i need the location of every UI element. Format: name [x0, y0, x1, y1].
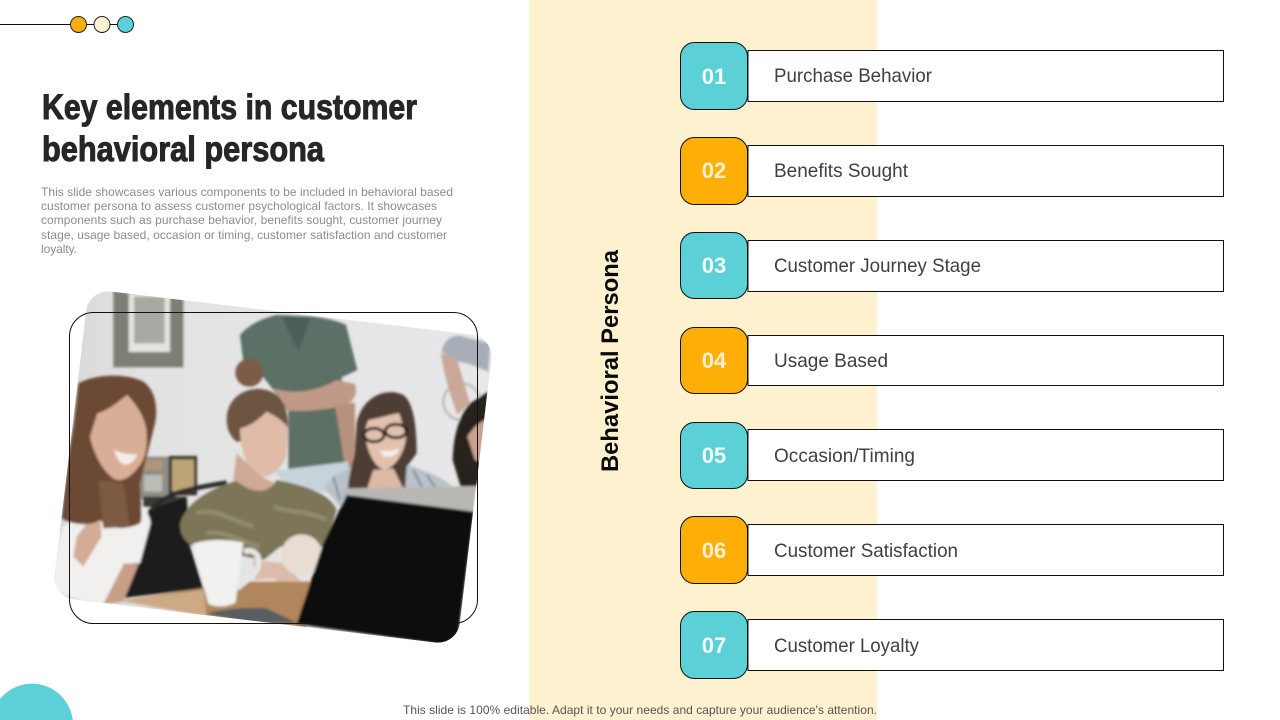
photo: team looking at a laptop — [54, 292, 492, 643]
middle woman — [180, 359, 337, 592]
books on shelf — [139, 456, 197, 507]
item 04 — [680, 328, 1224, 394]
item 04: Usage Based — [774, 350, 888, 372]
item 06: 06 — [702, 538, 726, 563]
table — [120, 582, 313, 628]
item 01: 01 — [702, 64, 726, 89]
description text: stage, usage based, occasion or timing, customer satisfaction and customer — [41, 228, 447, 242]
top right arm — [441, 336, 490, 415]
item 07: 07 — [702, 633, 726, 658]
item 03: Customer Journey Stage — [774, 255, 981, 277]
item 01: Purchase Behavior — [774, 65, 932, 87]
description text: customer persona to assess customer psychological factors. It showcases — [41, 199, 437, 213]
item 06 — [680, 516, 1224, 584]
title: Key elements in customer — [42, 88, 417, 127]
item 07 — [680, 612, 1224, 678]
item 02: Benefits Sought — [774, 160, 909, 182]
item 05: Occasion/Timing — [774, 445, 915, 467]
title: behavioral persona — [42, 130, 324, 169]
item 03: 03 — [702, 253, 726, 278]
description text: components such as purchase behavior, benefits sought, customer journey — [41, 213, 442, 227]
item 06: Customer Satisfaction — [774, 540, 958, 562]
picture frame — [113, 290, 183, 367]
title — [42, 88, 417, 169]
standing man — [240, 315, 357, 493]
mug — [193, 540, 259, 606]
description text: loyalty. — [41, 242, 77, 256]
background band — [529, 0, 877, 720]
item 04: 04 — [702, 348, 727, 373]
decorative dots timeline — [0, 16, 134, 32]
description text: This slide showcases various components to be included in behavioral based — [41, 185, 453, 199]
item 03 — [680, 232, 1224, 298]
photo outline frame — [70, 312, 478, 624]
far right woman — [453, 392, 488, 487]
item 02 — [680, 138, 1224, 204]
corner circle — [0, 684, 73, 720]
vertical label: Behavioral Persona — [597, 249, 624, 472]
description text — [41, 185, 453, 256]
item 01 — [680, 42, 1224, 110]
item 05: 05 — [702, 443, 726, 468]
keyboard — [207, 608, 298, 623]
footer note: This slide is 100% editable. Adapt it to your needs and capture your audience's attention. — [403, 703, 877, 717]
wall object right — [443, 383, 480, 420]
right woman — [325, 392, 453, 507]
item 02: 02 — [702, 158, 726, 183]
laptop — [297, 486, 477, 647]
black chair — [122, 483, 227, 598]
left woman — [54, 376, 156, 605]
item 07: Customer Loyalty — [774, 635, 919, 657]
item 05 — [680, 422, 1224, 488]
